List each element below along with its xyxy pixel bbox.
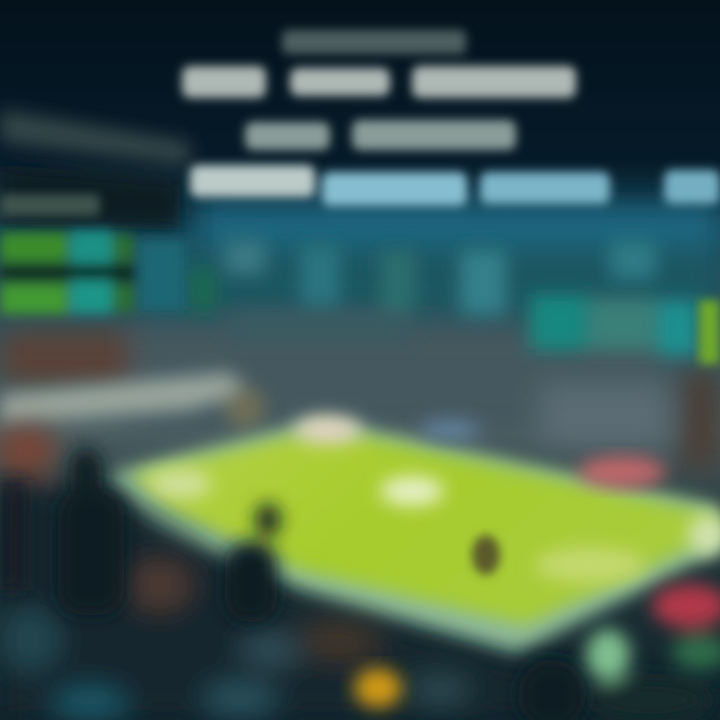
player on pitch: [472, 535, 500, 575]
stand columns: [190, 240, 656, 340]
spectator silhouettes: [0, 448, 586, 720]
title line 2: [182, 66, 576, 98]
pitch: [130, 428, 720, 625]
title: [182, 30, 720, 206]
title line 1: [282, 30, 466, 54]
yellow shirt spectator: [354, 668, 402, 708]
right corner crowd: [586, 584, 720, 720]
side label: [0, 194, 100, 216]
upper stand roof: [0, 110, 190, 230]
left scoreboards: [0, 230, 184, 314]
stand glow: [0, 205, 720, 470]
bottom crowd: [0, 426, 720, 720]
pitch surround: [105, 420, 720, 655]
title line 3: [245, 120, 516, 150]
pitch highlights: [148, 416, 720, 583]
title line 4: [190, 165, 720, 206]
goal structure: [0, 372, 265, 430]
green board: [699, 300, 720, 364]
red banner: [578, 456, 666, 488]
right ad boards: [530, 295, 698, 356]
